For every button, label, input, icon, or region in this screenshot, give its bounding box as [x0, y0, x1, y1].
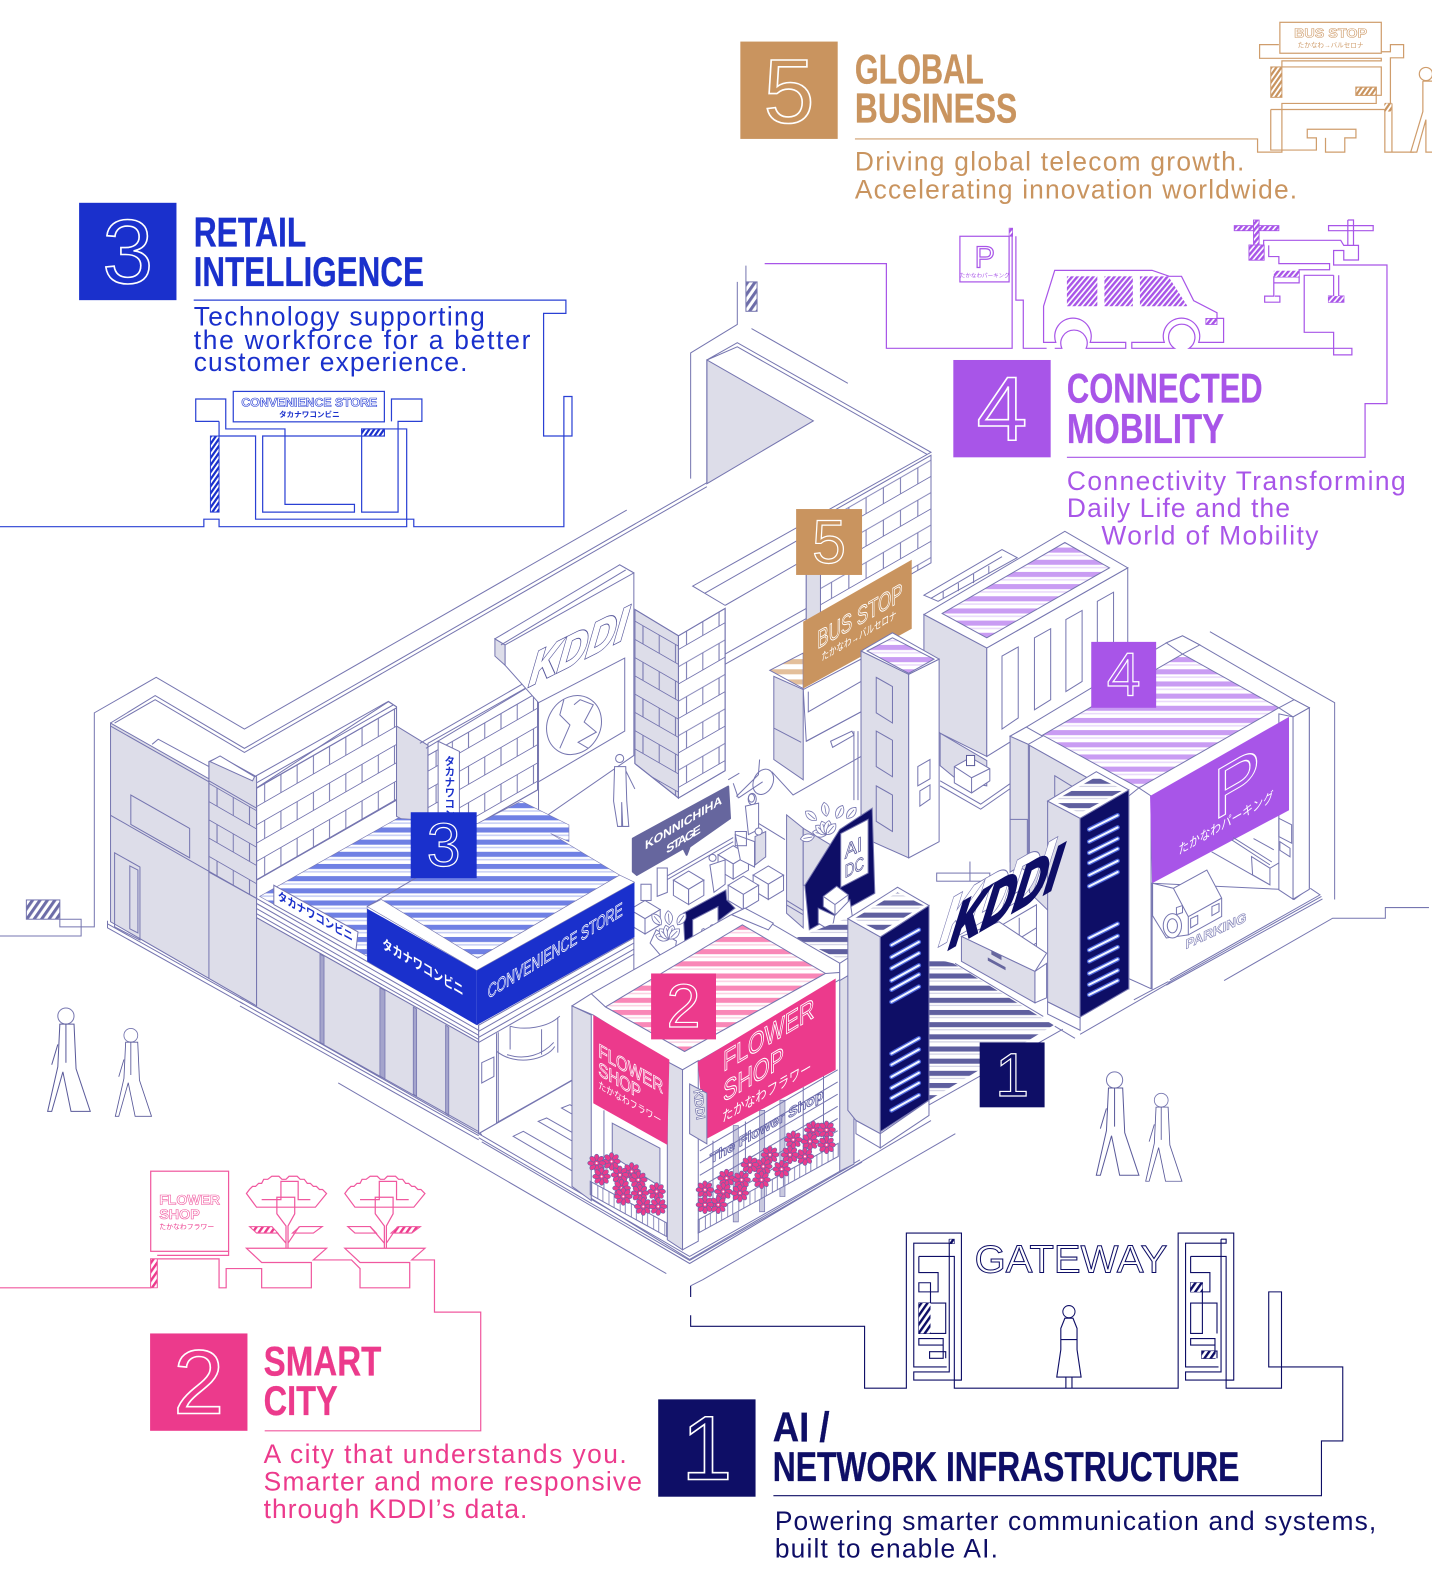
icon: bus stop line art — [855, 22, 1432, 152]
convenience store roof stripes — [260, 801, 620, 958]
badge 1 — [980, 1041, 1045, 1109]
section 2 smart city: callout — [0, 1171, 642, 1524]
flower shop glass grid — [700, 1070, 838, 1222]
heading: smart city — [264, 1338, 381, 1424]
bus stop shelter — [770, 560, 912, 795]
icon: parking sign — [765, 228, 1047, 348]
icon: flower shop sign and connector: SHOP — [159, 1207, 200, 1223]
kddi large logo — [936, 825, 1068, 963]
icon: drone line art — [1067, 220, 1387, 457]
parking building: P — [1213, 731, 1260, 837]
badge 4 — [1091, 641, 1156, 709]
flower shop banners: たかなわフラワー — [722, 1059, 811, 1126]
section 5 global business: callout — [740, 22, 1432, 205]
number box 2 — [150, 1332, 247, 1434]
heading: smart city: CITY — [264, 1377, 338, 1424]
description text 5: Driving global telecom growth. — [855, 146, 1244, 176]
heading: retail intelligence — [194, 208, 424, 295]
flower clusters — [588, 1121, 835, 1215]
convenience store front — [240, 898, 634, 1171]
konnichiha stage sign: STAGE — [666, 821, 701, 857]
small store sign: タカナワコンビニ — [278, 887, 353, 944]
parking navy led tower — [1048, 772, 1129, 1030]
description text 4: Daily Life and the — [1067, 493, 1290, 523]
konnichiha stage sign: KONNICHIHA — [645, 792, 723, 853]
badge 2 — [651, 972, 716, 1040]
number box 2: 2 — [173, 1332, 224, 1434]
heading: global business: BUSINESS — [855, 85, 1017, 132]
small kddi vertical sign — [690, 1084, 707, 1144]
description text 5: Accelerating innovation worldwide. — [855, 175, 1297, 205]
description text 2: through KDDI’s data. — [264, 1494, 527, 1524]
flower shop banners: FLOWER — [598, 1040, 663, 1099]
parked car — [1153, 870, 1222, 938]
bus stop sign: BUS STOP — [817, 577, 903, 655]
kddi large logo: KDDI — [936, 825, 1059, 959]
description text 3: customer experience. — [194, 347, 468, 377]
number box 1 — [658, 1397, 756, 1499]
ai dc display: DC — [845, 852, 864, 883]
description text 2: A city that understands you. — [264, 1439, 627, 1469]
reception counter — [937, 819, 1047, 1003]
description text 4: World of Mobility — [1101, 521, 1319, 551]
ai small sign and plant — [649, 890, 735, 956]
badge 1: 1 — [995, 1041, 1029, 1109]
description text 3: the workforce for a better — [194, 325, 531, 355]
icon: flower shop sign and connector: たかなわフラワー — [159, 1223, 214, 1231]
ai small sign and plant: AI — [697, 921, 714, 949]
convenience store blue banner — [367, 875, 634, 1025]
icon: convenience store line art — [0, 300, 572, 527]
person by billboard — [614, 754, 635, 826]
isometric city scene — [0, 266, 1429, 1286]
back building roof — [111, 343, 931, 811]
stage boxes and props — [630, 794, 785, 934]
number box 3 — [79, 201, 176, 303]
konnichiha stage sign — [633, 787, 730, 875]
number box 3: 3 — [102, 201, 153, 303]
kddi billboard wall — [495, 565, 634, 821]
heading: connected mobility — [1067, 365, 1263, 452]
description text 2: Smarter and more responsive — [264, 1467, 642, 1497]
vertical convenience store sign — [438, 741, 459, 841]
vertical convenience store sign: タカナワコンビニ — [443, 755, 455, 841]
middle window building — [420, 675, 538, 852]
description text 3 — [194, 302, 531, 377]
flower shop glass grid: The Flower Shop — [710, 1086, 824, 1168]
icon: convenience store line art: CONVENIENCE STORE — [241, 397, 377, 410]
badge 3: 3 — [427, 811, 461, 879]
logo: kddi outline sign: KDDI — [527, 596, 632, 697]
icon: flower in pot right — [345, 1176, 425, 1248]
description text 2 — [264, 1439, 642, 1524]
section 3 retail intelligence: callout — [0, 201, 572, 527]
icon: flower shop sign and connector — [0, 1171, 481, 1431]
description text 4: Connectivity Transforming — [1067, 466, 1406, 496]
logo: kddi outline sign: KDDI — [527, 596, 632, 697]
number box 5: 5 — [764, 41, 814, 143]
back courtyard desk — [940, 733, 1014, 809]
icon: parking sign: たかなわパーキング — [960, 271, 1010, 279]
number box 4: 4 — [977, 358, 1027, 460]
left window building — [255, 701, 428, 880]
icon: flower in pot left — [246, 1176, 327, 1248]
left gray building — [108, 723, 257, 1006]
description text 3: Technology supporting — [194, 302, 485, 332]
brick tower behind billboard — [635, 608, 725, 798]
heading: global business: GLOBAL — [855, 46, 984, 93]
icon: flower shop sign and connector: FLOWER — [159, 1193, 220, 1209]
heading: connected mobility: MOBILITY — [1067, 405, 1224, 452]
number box 1: 1 — [681, 1397, 732, 1499]
badge 5 — [796, 508, 862, 576]
badge 4: 4 — [1107, 641, 1141, 709]
number box 5 — [740, 41, 838, 143]
flower shop banners — [593, 979, 836, 1145]
bus stop sign: たかなわ→バルセロナ — [821, 609, 897, 664]
icon: car line art — [1044, 270, 1352, 355]
convenience store blue banner: CONVENIENCE STORE — [488, 899, 623, 1003]
planter fences — [590, 1143, 838, 1237]
heading: ai network infrastructure — [773, 1403, 1239, 1490]
icon: gateway line art — [691, 1233, 1343, 1496]
back right brick building — [806, 455, 931, 635]
tall tower with purple roof — [861, 633, 939, 858]
heading: ai network infrastructure: AI / — [773, 1403, 830, 1450]
pedestrians left — [48, 1008, 152, 1116]
description text 4 — [1067, 466, 1406, 551]
parking ground label: PARKING — [1186, 909, 1246, 952]
street lamp — [831, 731, 858, 800]
heading: connected mobility: CONNECTED — [1067, 365, 1263, 412]
pedestrians right — [1096, 1072, 1182, 1181]
purple back building — [924, 531, 1128, 756]
small store sign — [274, 885, 358, 950]
flower shop building — [479, 908, 931, 1263]
ai dc display: AI — [845, 832, 862, 864]
description text 1: Powering smarter communication and systems, — [775, 1506, 1376, 1536]
heading: smart city: SMART — [264, 1338, 381, 1385]
flower shop banners: たかなわフラワー — [598, 1079, 661, 1127]
kddi large logo: KDDI — [936, 825, 1059, 959]
icon: gateway line art: GATEWAY — [975, 1239, 1167, 1282]
navy led tower center — [848, 887, 929, 1148]
parking building: たかなわパーキング — [1178, 788, 1274, 859]
icon: bus stop line art: たかなわ→バルセロナ — [1298, 42, 1364, 50]
icon: globe — [536, 686, 612, 765]
description text 1: built to enable AI. — [775, 1534, 998, 1564]
ai dc display — [787, 802, 875, 931]
flower shop banners: FLOWER — [723, 991, 814, 1078]
section 1 ai network infrastructure: callout — [658, 1233, 1376, 1564]
icon: parking sign: P — [975, 241, 995, 275]
bus stop sign — [803, 560, 912, 689]
heading: retail intelligence: INTELLIGENCE — [194, 248, 424, 295]
flower shop banners: SHOP — [598, 1058, 641, 1104]
crosswalk stripes — [796, 918, 1075, 1126]
flower shop banners: SHOP — [723, 1040, 784, 1109]
kddi large logo: KDDI — [945, 829, 1068, 963]
heading: ai network infrastructure: NETWORK INFRASTRUCTURE — [773, 1443, 1239, 1490]
badge 2: 2 — [667, 972, 700, 1040]
section 4 connected mobility: callout — [765, 220, 1406, 551]
convenience store blue banner: タカナワコンビニ — [382, 934, 463, 1000]
icon: bus stop line art: BUS STOP — [1294, 26, 1367, 41]
outer site boundary lines — [0, 266, 1429, 1286]
badge 3 — [411, 811, 477, 879]
badge 5: 5 — [812, 508, 846, 576]
small kddi vertical sign: KDDI — [691, 1087, 707, 1122]
bicycle — [728, 760, 778, 805]
heading: global business — [855, 46, 1017, 132]
icon: convenience store line art: タカナワコンビニ — [279, 409, 340, 419]
parking building — [1010, 636, 1322, 1034]
number box 4 — [953, 358, 1051, 460]
description text 1 — [775, 1506, 1376, 1564]
description text 5 — [855, 146, 1297, 205]
heading: retail intelligence: RETAIL — [194, 208, 306, 255]
